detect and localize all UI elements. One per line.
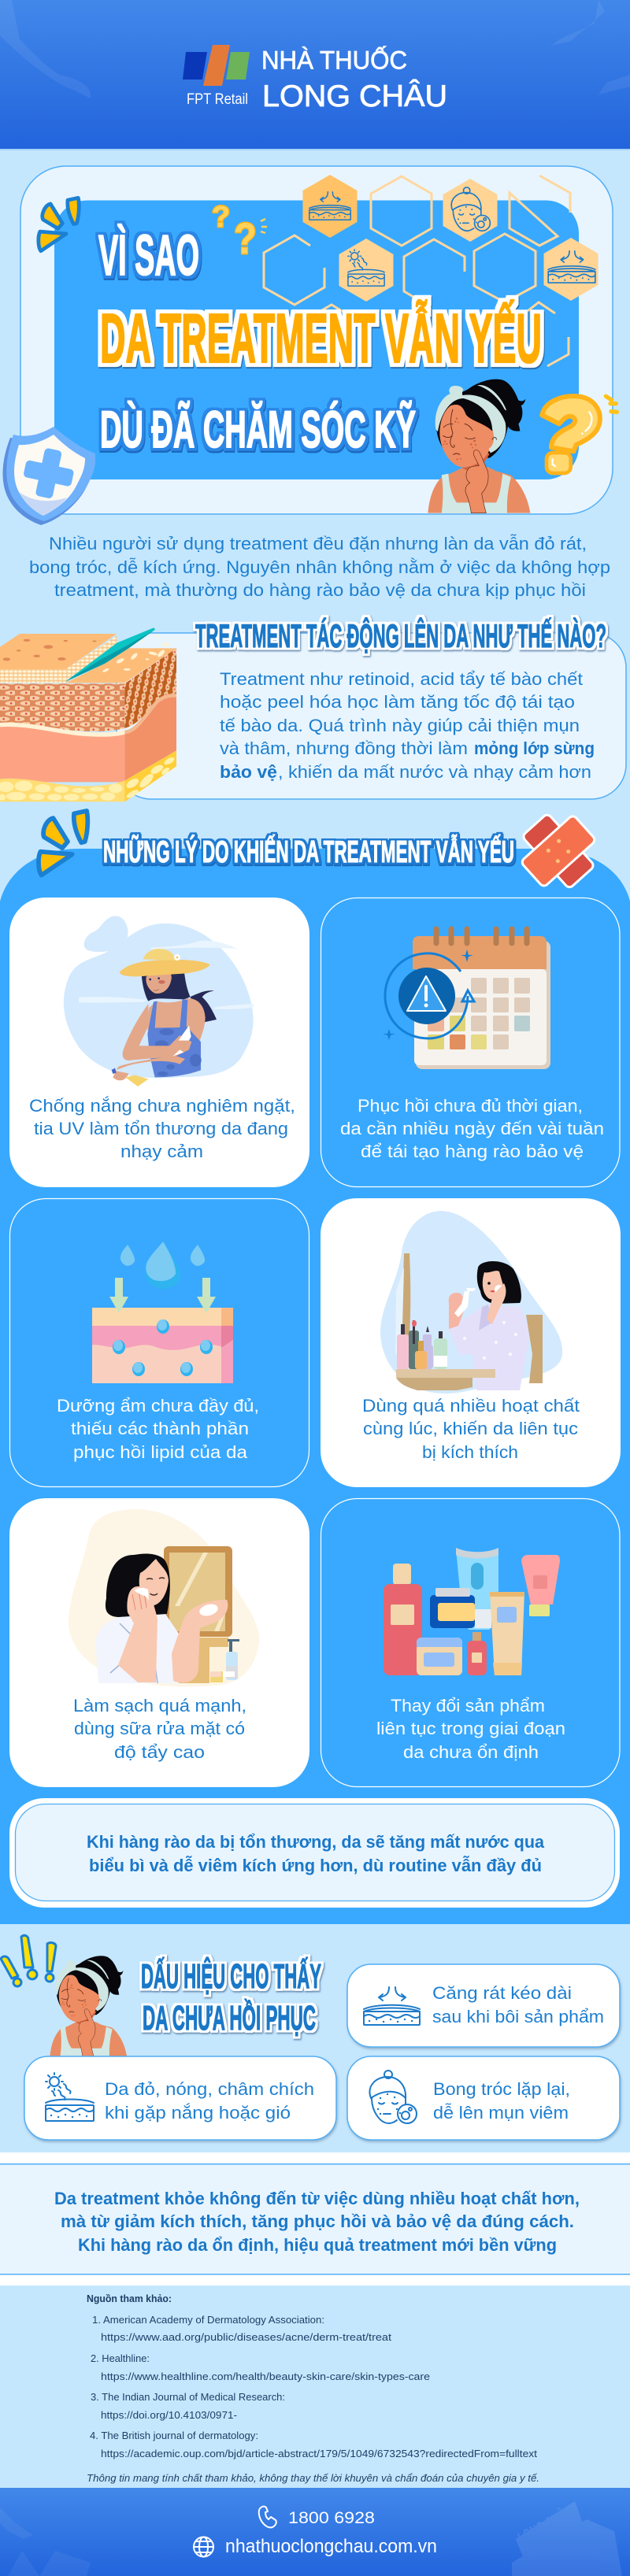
icon: face hex xyxy=(451,187,490,231)
hero inner blue block xyxy=(54,200,579,479)
blue reasons section background xyxy=(0,849,630,1924)
intro paragraph xyxy=(29,534,610,600)
panel body text: mỏng lớp sừng xyxy=(474,738,595,758)
card 3 text xyxy=(57,1396,259,1462)
logo: FPT Retail: FPT Retail xyxy=(187,91,248,108)
section rays xyxy=(39,811,87,875)
sign card: tightness xyxy=(347,1964,620,2047)
footer storefront watermark xyxy=(512,2501,622,2576)
shield with cross xyxy=(3,427,95,525)
panel body text: hoặc peel hóa học làm tăng tốc độ tái tạo xyxy=(220,692,575,712)
footer xyxy=(0,2488,630,2576)
references: Thông tin mang tính chất tham khảo, không thay thế lời khuyên và chẩn đoán của chuyên gia y tế. xyxy=(87,2473,539,2484)
card 6 text: Thay đổi sản phẩm xyxy=(391,1696,545,1715)
references: 4. The British journal of dermatology: xyxy=(90,2430,258,2441)
card 4: too many actives xyxy=(321,1198,621,1487)
card 2 text: da cần nhiều ngày đến vài tuần xyxy=(340,1119,604,1138)
card 2: recovery time xyxy=(321,898,620,1187)
header band xyxy=(0,0,630,150)
hero rays xyxy=(39,198,79,251)
hexagon pattern xyxy=(264,175,598,366)
references: https://academic.oup.com/bjd/article-abstract/179/5/1049/6732543?redirectedFrom=fulltext xyxy=(101,2448,538,2459)
small question marks: ? xyxy=(234,213,257,263)
card 5 text: Làm sạch quá mạnh, xyxy=(73,1696,246,1715)
sign card: redness xyxy=(24,2056,336,2140)
card 5 text: dùng sữa rửa mặt có xyxy=(74,1719,245,1738)
icon: sun hex xyxy=(348,250,384,286)
references: https://www.healthline.com/health/beauty-skin-care/skin-types-care xyxy=(101,2371,430,2382)
logo: Nhà Thuốc: NHÀ THUỐC xyxy=(261,46,407,74)
card 4 text: Dùng quá nhiều hoạt chất xyxy=(362,1396,580,1416)
card 5 text: độ tẩy cao xyxy=(114,1742,205,1762)
card 3 text: phục hồi lipid của da xyxy=(73,1442,248,1462)
card 3 text: thiếu các thành phần xyxy=(71,1419,249,1438)
exclamation marks xyxy=(1,1935,56,1986)
heading line 2: DA CHƯA HỒI PHỤC xyxy=(143,1998,316,2037)
illustration: woman at vanity table xyxy=(380,1211,562,1393)
card 3: moisturizing xyxy=(9,1198,309,1486)
intro paragraph: Nhiều người sử dụng treatment đều đặn nhưng làn da vẫn đỏ rát, xyxy=(49,534,587,553)
website: nhathuoclongchau.com.vn xyxy=(225,2536,437,2557)
panel body text: và thâm, nhưng đồng thời làm xyxy=(220,738,468,758)
bandage icon xyxy=(508,801,609,901)
sign card: tightness: Căng rát kéo dài xyxy=(432,1983,572,2003)
footer storefront watermark: LONG CHÂU xyxy=(515,2503,576,2548)
hero panel xyxy=(3,166,617,525)
icon: globe xyxy=(194,2537,213,2557)
intro paragraph: bong tróc, dễ kích ứng. Nguyên nhân không nằm ở việc da không hợp xyxy=(29,557,610,577)
small question marks xyxy=(212,201,267,263)
sign card: peeling: dễ lên mụn viêm xyxy=(433,2103,569,2123)
icon: skin layers hex 1 xyxy=(309,192,350,220)
card 5: harsh cleansing xyxy=(9,1498,309,1787)
card 1 text: tia UV làm tổn thương da đang xyxy=(34,1119,288,1138)
logo: Long Châu: LONG CHÂU xyxy=(262,80,447,113)
small question marks: ? xyxy=(212,201,230,234)
card 2 text: Phục hồi chưa đủ thời gian, xyxy=(358,1096,583,1116)
heading line 1: DẤU HIỆU CHO THẤY xyxy=(141,1956,321,1996)
callout: barrier damage: biểu bì và dễ viêm kích ứng hơn, dù routine vẫn đầy đủ xyxy=(89,1856,542,1875)
card 1: sunscreen xyxy=(9,898,309,1187)
callout: barrier damage: Khi hàng rào da bị tổn thương, da sẽ tăng mất nước qua xyxy=(87,1832,545,1852)
references: https://www.aad.org/public/diseases/acne/derm-treat/treat xyxy=(101,2332,392,2343)
woman with irritated skin xyxy=(428,379,530,513)
callout: barrier damage xyxy=(9,1798,620,1908)
signs section xyxy=(1,1935,620,2140)
card 6 text: liên tục trong giai đoạn xyxy=(376,1719,565,1738)
references: https://doi.org/10.4103/0971- xyxy=(101,2410,237,2421)
icon: skin layers hex 2 xyxy=(548,251,595,283)
logo: FPT mark xyxy=(183,45,250,86)
illustration: skincare products xyxy=(384,1548,560,1675)
card 2 text: để tái tạo hàng rào bảo vệ xyxy=(361,1142,584,1161)
references xyxy=(87,2293,539,2484)
illustration: calendar with warning xyxy=(383,929,550,1069)
title line 1: VÌ SAO xyxy=(98,224,199,287)
big question mark xyxy=(542,396,617,473)
references: 2. Healthline: xyxy=(91,2353,150,2364)
card 4 text: bị kích thích xyxy=(422,1442,518,1462)
card 6 text xyxy=(376,1696,565,1762)
illustration: woman washing face xyxy=(69,1509,259,1686)
card 3 text: Dưỡng ẩm chưa đầy đủ, xyxy=(57,1396,259,1416)
sign card: peeling: Bong tróc lặp lại, xyxy=(433,2079,570,2099)
icon: phone xyxy=(259,2507,276,2527)
card 6: changing products xyxy=(321,1499,620,1787)
card 4 text xyxy=(362,1396,580,1462)
sign card: peeling xyxy=(347,2056,620,2140)
card 6 text: da chưa ổn định xyxy=(403,1742,539,1762)
card 1 text: Chống nắng chưa nghiêm ngặt, xyxy=(29,1096,295,1116)
conclusion band: mà từ giảm kích thích, tăng phục hồi và bảo vệ da đúng cách. xyxy=(61,2211,574,2231)
references: Nguồn tham khảo: xyxy=(87,2293,172,2304)
references: 1. American Academy of Dermatology Association: xyxy=(92,2315,324,2326)
panel body text: Treatment như retinoid, acid tẩy tế bào chết xyxy=(220,669,583,689)
sign card: tightness: sau khi bôi sản phẩm xyxy=(432,2007,604,2026)
sign card: redness: khi gặp nắng hoặc gió xyxy=(105,2103,291,2123)
panel body text xyxy=(220,669,595,782)
conclusion band: Khi hàng rào da ổn định, hiệu quả treatment mới bền vững xyxy=(78,2235,557,2255)
skin cross-section illustration xyxy=(0,627,176,801)
conclusion band xyxy=(0,2152,630,2285)
panel body text: bảo vệ xyxy=(220,762,277,782)
illustration: woman with hat applying sunscreen xyxy=(64,916,254,1086)
panel: how treatment affects skin xyxy=(0,616,626,801)
card 1 text xyxy=(29,1096,295,1161)
references: 3. The Indian Journal of Medical Research: xyxy=(91,2392,285,2403)
panel body text: , khiến da mất nước và nhạy cảm hơn xyxy=(278,762,591,782)
card 2 text xyxy=(340,1096,604,1161)
woman xyxy=(50,1956,127,2056)
card 4 text: cùng lúc, khiến da liên tục xyxy=(363,1419,578,1438)
card 1 text: nhạy cảm xyxy=(120,1142,203,1161)
card 5 text xyxy=(73,1696,246,1762)
panel body text: tế bào da. Quá trình này giúp cải thiện mụn xyxy=(220,716,580,735)
phone number: 1800 6928 xyxy=(288,2509,375,2527)
conclusion band: Da treatment khỏe không đến từ việc dùng nhiều hoạt chất hơn, xyxy=(54,2189,580,2208)
intro paragraph: treatment, mà thường do hàng rào bảo vệ da chưa kịp phục hồi xyxy=(54,580,586,600)
illustration: skin layers with drops xyxy=(92,1242,233,1383)
sign card: redness: Da đỏ, nóng, châm chích xyxy=(105,2079,314,2099)
